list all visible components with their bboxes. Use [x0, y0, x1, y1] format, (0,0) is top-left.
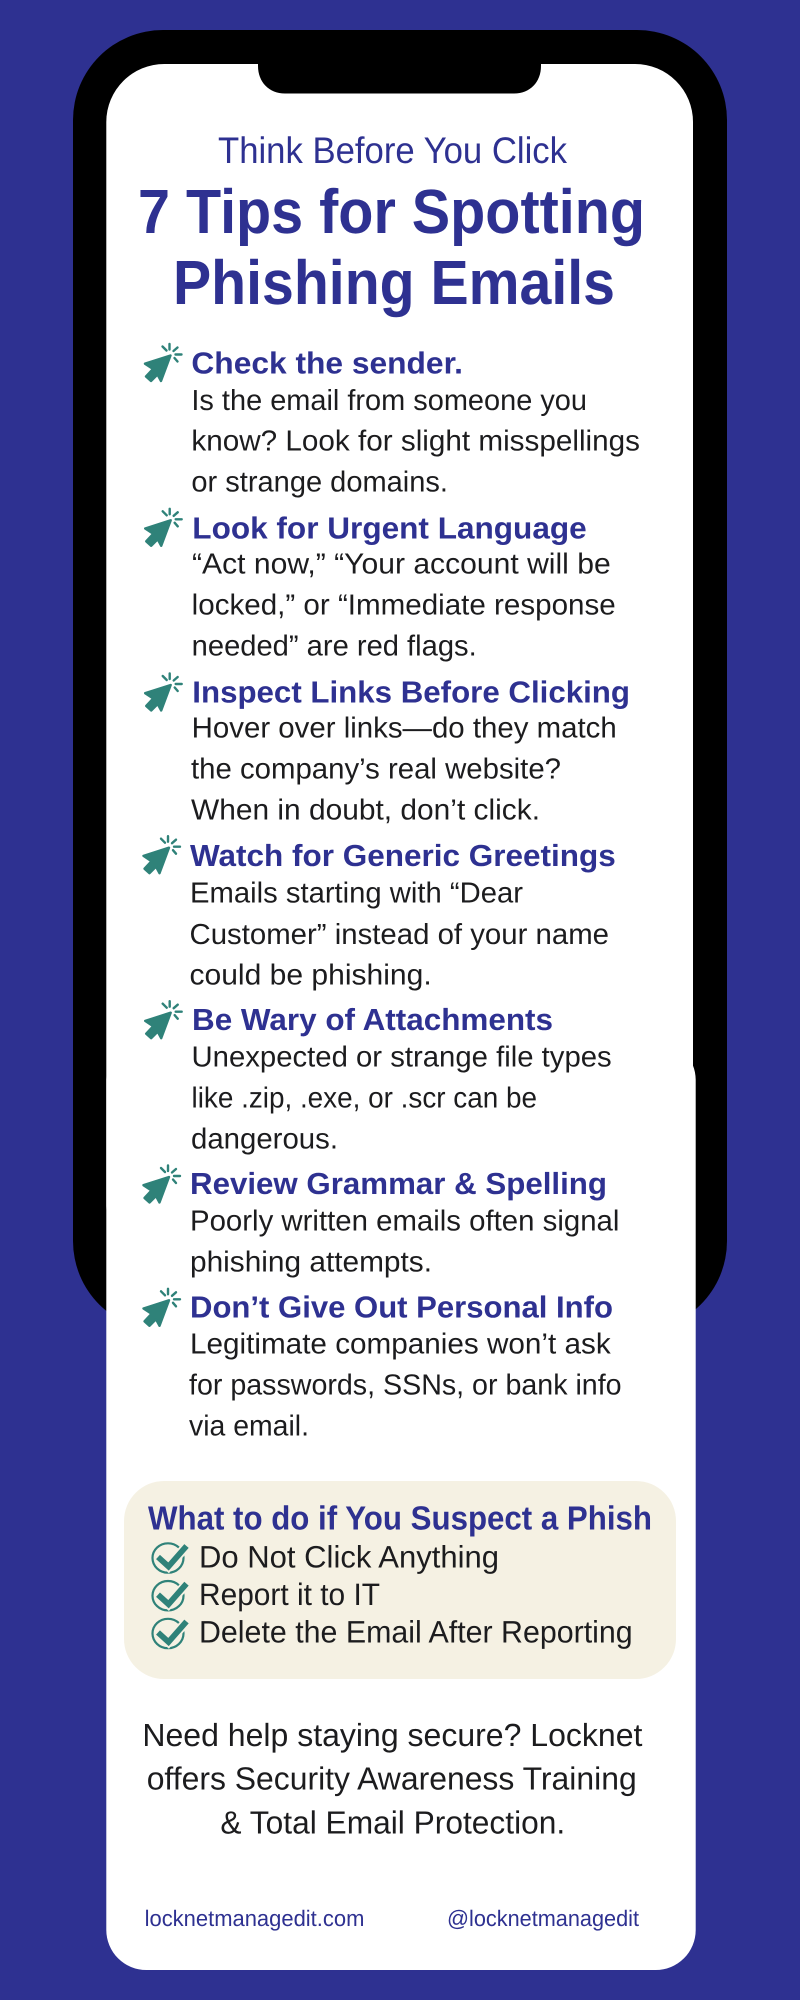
panel background	[124, 1481, 676, 1679]
body text: “Act now,” “Your account will be	[192, 548, 611, 580]
panel: tip 5	[145, 1001, 612, 1155]
closing call to action	[142, 1717, 643, 1840]
body text	[189, 1328, 622, 1442]
heading: Inspect Links Before Clicking	[192, 676, 630, 710]
body text: Hover over links—do they match	[192, 712, 617, 744]
heading: Don’t Give Out Personal Info	[190, 1291, 613, 1325]
body text	[191, 385, 640, 498]
panel: tip 3	[145, 674, 630, 826]
body text	[191, 1042, 612, 1155]
body text: locked,” or “Immediate response	[192, 590, 616, 622]
icon: cursor	[144, 1289, 180, 1326]
body text: Legitimate companies won’t ask	[190, 1328, 611, 1360]
body text: When in doubt, don’t click.	[191, 794, 540, 826]
icon: cursor	[145, 674, 182, 710]
body text: Unexpected or strange file types	[192, 1042, 612, 1074]
panel: tip 1	[145, 344, 640, 498]
panel: tip 6	[144, 1166, 619, 1279]
body text	[192, 548, 616, 662]
icon: check	[152, 1543, 186, 1573]
icon: cursor	[145, 1001, 182, 1038]
closing call to action: offers Security Awareness Training	[147, 1760, 637, 1796]
body text: for passwords, SSNs, or bank info	[189, 1369, 622, 1401]
body text: Customer” instead of your name	[190, 919, 609, 951]
panel: tip 7	[144, 1289, 622, 1442]
body text: or strange domains.	[191, 466, 448, 498]
phone: black frame	[73, 30, 727, 1331]
icon: cursor	[145, 509, 182, 546]
title block	[138, 130, 645, 318]
closing call to action: & Total Email Protection.	[220, 1804, 565, 1840]
footer: website: locknetmanagedit.com	[145, 1906, 364, 1931]
subtitle: Think Before You Click	[218, 130, 567, 171]
item text: Report it to IT	[199, 1577, 380, 1612]
icon: check	[152, 1581, 186, 1610]
body text: Poorly written emails often signal	[190, 1206, 619, 1238]
item text: Do Not Click Anything	[199, 1539, 499, 1574]
checklist item 2	[152, 1577, 380, 1612]
heading: Look for Urgent Language	[192, 511, 587, 545]
phone: white screen	[106, 64, 693, 1264]
body text: know? Look for slight misspellings	[191, 426, 640, 458]
item text: Delete the Email After Reporting	[199, 1615, 633, 1650]
body text: Is the email from someone you	[191, 385, 587, 417]
panel: tip 2	[145, 509, 616, 662]
main heading: Phishing Emails	[173, 248, 615, 318]
body text: phishing attempts.	[190, 1247, 432, 1279]
body text	[191, 712, 617, 826]
body text: like .zip, .exe, or .scr can be	[192, 1083, 537, 1115]
body text: dangerous.	[191, 1123, 338, 1155]
icon: cursor	[144, 836, 180, 873]
panel heading: What to do if You Suspect a Phish	[148, 1500, 652, 1537]
icon: cursor	[145, 344, 182, 381]
checklist item 1	[152, 1539, 499, 1574]
phone: notch	[258, 60, 541, 94]
body text: the company’s real website?	[191, 753, 561, 785]
footer: social handle: @locknetmanagedit	[447, 1906, 640, 1931]
heading: Be Wary of Attachments	[192, 1003, 553, 1037]
body text	[190, 878, 609, 991]
main heading: 7 Tips for Spotting	[138, 177, 645, 247]
panel: lower white card	[106, 1040, 696, 1970]
body text: Emails starting with “Dear	[190, 878, 523, 910]
panel: what to do if you suspect a phish	[124, 1481, 676, 1679]
body text: could be phishing.	[190, 959, 432, 991]
heading: Check the sender.	[191, 346, 463, 380]
body text	[190, 1206, 619, 1279]
body text: needed” are red flags.	[192, 630, 477, 662]
icon: check	[152, 1619, 186, 1648]
heading: Review Grammar & Spelling	[190, 1167, 607, 1201]
icon: cursor	[144, 1166, 180, 1202]
panel: tip 4	[144, 836, 616, 991]
main heading	[138, 177, 645, 318]
body text: via email.	[189, 1410, 309, 1442]
closing call to action: Need help staying secure? Locknet	[142, 1717, 643, 1753]
heading: Watch for Generic Greetings	[190, 839, 616, 873]
checklist item 3	[152, 1615, 633, 1650]
